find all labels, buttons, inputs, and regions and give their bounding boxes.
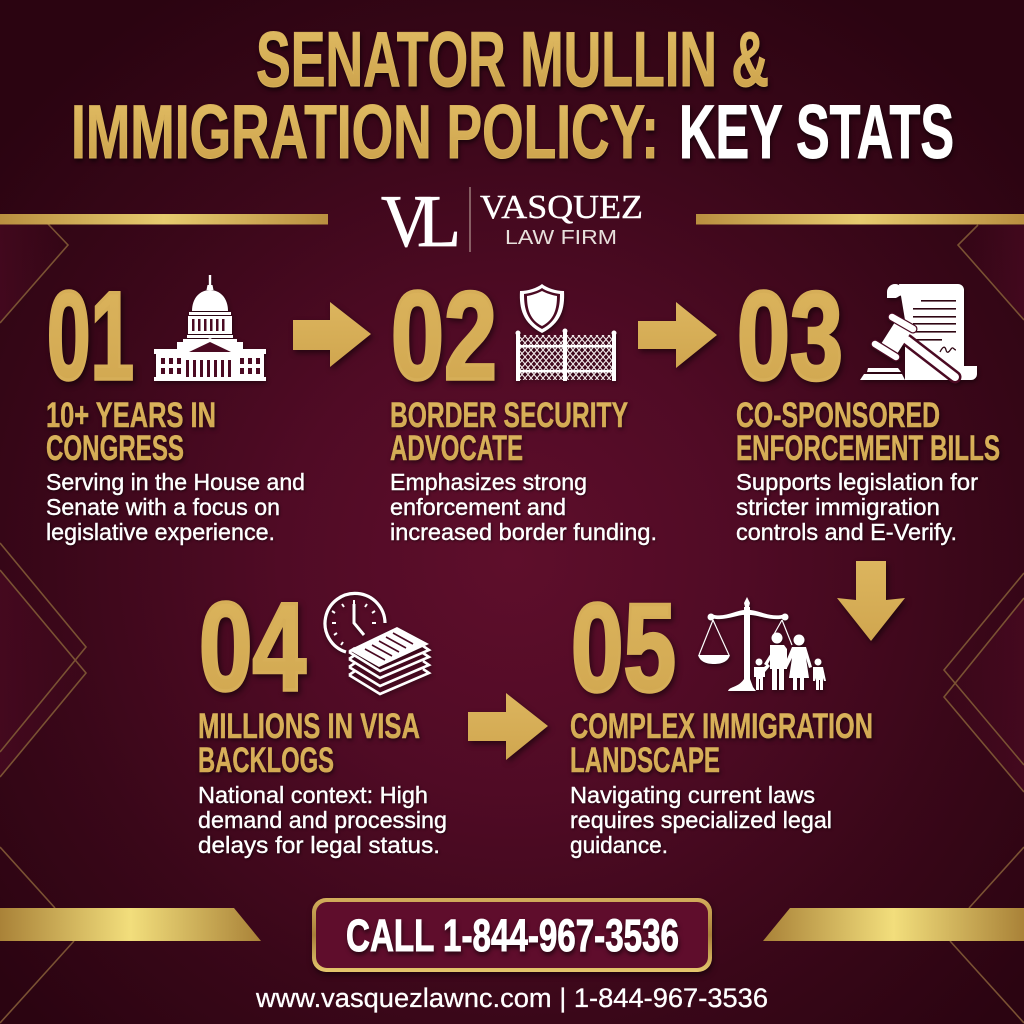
description: guidance. [570, 832, 668, 858]
description: requires specialized legal [570, 807, 832, 833]
description: Senate with a focus on [46, 494, 280, 520]
description [198, 782, 447, 858]
arrow 4 to 5 [468, 693, 548, 760]
call button [312, 898, 712, 972]
description [736, 469, 978, 545]
logo: VASQUEZ [480, 189, 643, 226]
panel: 03 enforcement bills [736, 267, 1000, 545]
footer contact: www.vasquezlawnc.com | 1-844-967-3536 [255, 983, 768, 1013]
number 05: 05 [571, 579, 676, 718]
description: increased border funding. [390, 519, 657, 545]
description: legislative experience. [46, 519, 275, 545]
heading [390, 396, 628, 468]
icon: gavel and scroll [860, 284, 977, 380]
description [390, 469, 657, 545]
description: stricter immigration [736, 494, 940, 520]
arrow 3 to 5 [837, 561, 905, 641]
heading: 10+ YEARS IN [46, 396, 216, 435]
description: enforcement and [390, 494, 566, 520]
title: IMMIGRATION POLICY: [71, 90, 659, 175]
heading [570, 707, 873, 780]
arrow 2 to 3 [638, 302, 717, 368]
description: Navigating current laws [570, 782, 815, 808]
heading: MILLIONS IN VISA [198, 707, 420, 746]
description: demand and processing [198, 807, 447, 833]
description: Emphasizes strong [390, 469, 587, 495]
header bar left [0, 214, 328, 224]
ribbon right [763, 908, 1024, 941]
ribbon left [0, 908, 261, 941]
heading: CONGRESS [46, 429, 184, 468]
number 01: 01 [47, 267, 134, 406]
decorative corner shapes [0, 224, 1024, 1023]
number 04: 04 [199, 578, 306, 717]
title [71, 15, 954, 175]
logo [381, 181, 643, 263]
description: National context: High [198, 782, 428, 808]
logo: V [381, 181, 431, 263]
header bar right [696, 214, 1024, 224]
panel: 02 border security [390, 267, 657, 545]
icon: scales of justice and family [698, 597, 826, 691]
panel: 01 years in congress [46, 267, 305, 545]
heading [198, 707, 420, 780]
logo: LAW FIRM [505, 227, 617, 249]
description [46, 469, 305, 545]
icon: capitol building [154, 275, 266, 381]
icon: shield and fence [516, 284, 616, 381]
heading: BACKLOGS [198, 741, 334, 780]
icon: clock and paper stack [325, 593, 429, 694]
arrow 1 to 2 [293, 302, 371, 367]
heading: CO-SPONSORED [736, 396, 940, 435]
heading: BORDER SECURITY [390, 396, 628, 435]
heading [46, 396, 216, 468]
heading: LANDSCAPE [570, 741, 720, 780]
title: SENATOR MULLIN & [256, 15, 769, 103]
description: delays for legal status. [198, 832, 440, 858]
heading [736, 396, 1000, 468]
number 02: 02 [391, 267, 497, 406]
heading: ADVOCATE [390, 429, 523, 468]
description [570, 782, 832, 858]
logo: L [417, 181, 461, 263]
description: Serving in the House and [46, 469, 305, 495]
description: controls and E-Verify. [736, 519, 957, 545]
call button: CALL 1-844-967-3536 [346, 910, 679, 961]
number 03: 03 [737, 267, 843, 406]
heading: COMPLEX IMMIGRATION [570, 707, 873, 746]
panel: 05 immigration landscape [570, 579, 873, 858]
panel: 04 visa backlogs [198, 578, 447, 858]
description: Supports legislation for [736, 469, 978, 495]
